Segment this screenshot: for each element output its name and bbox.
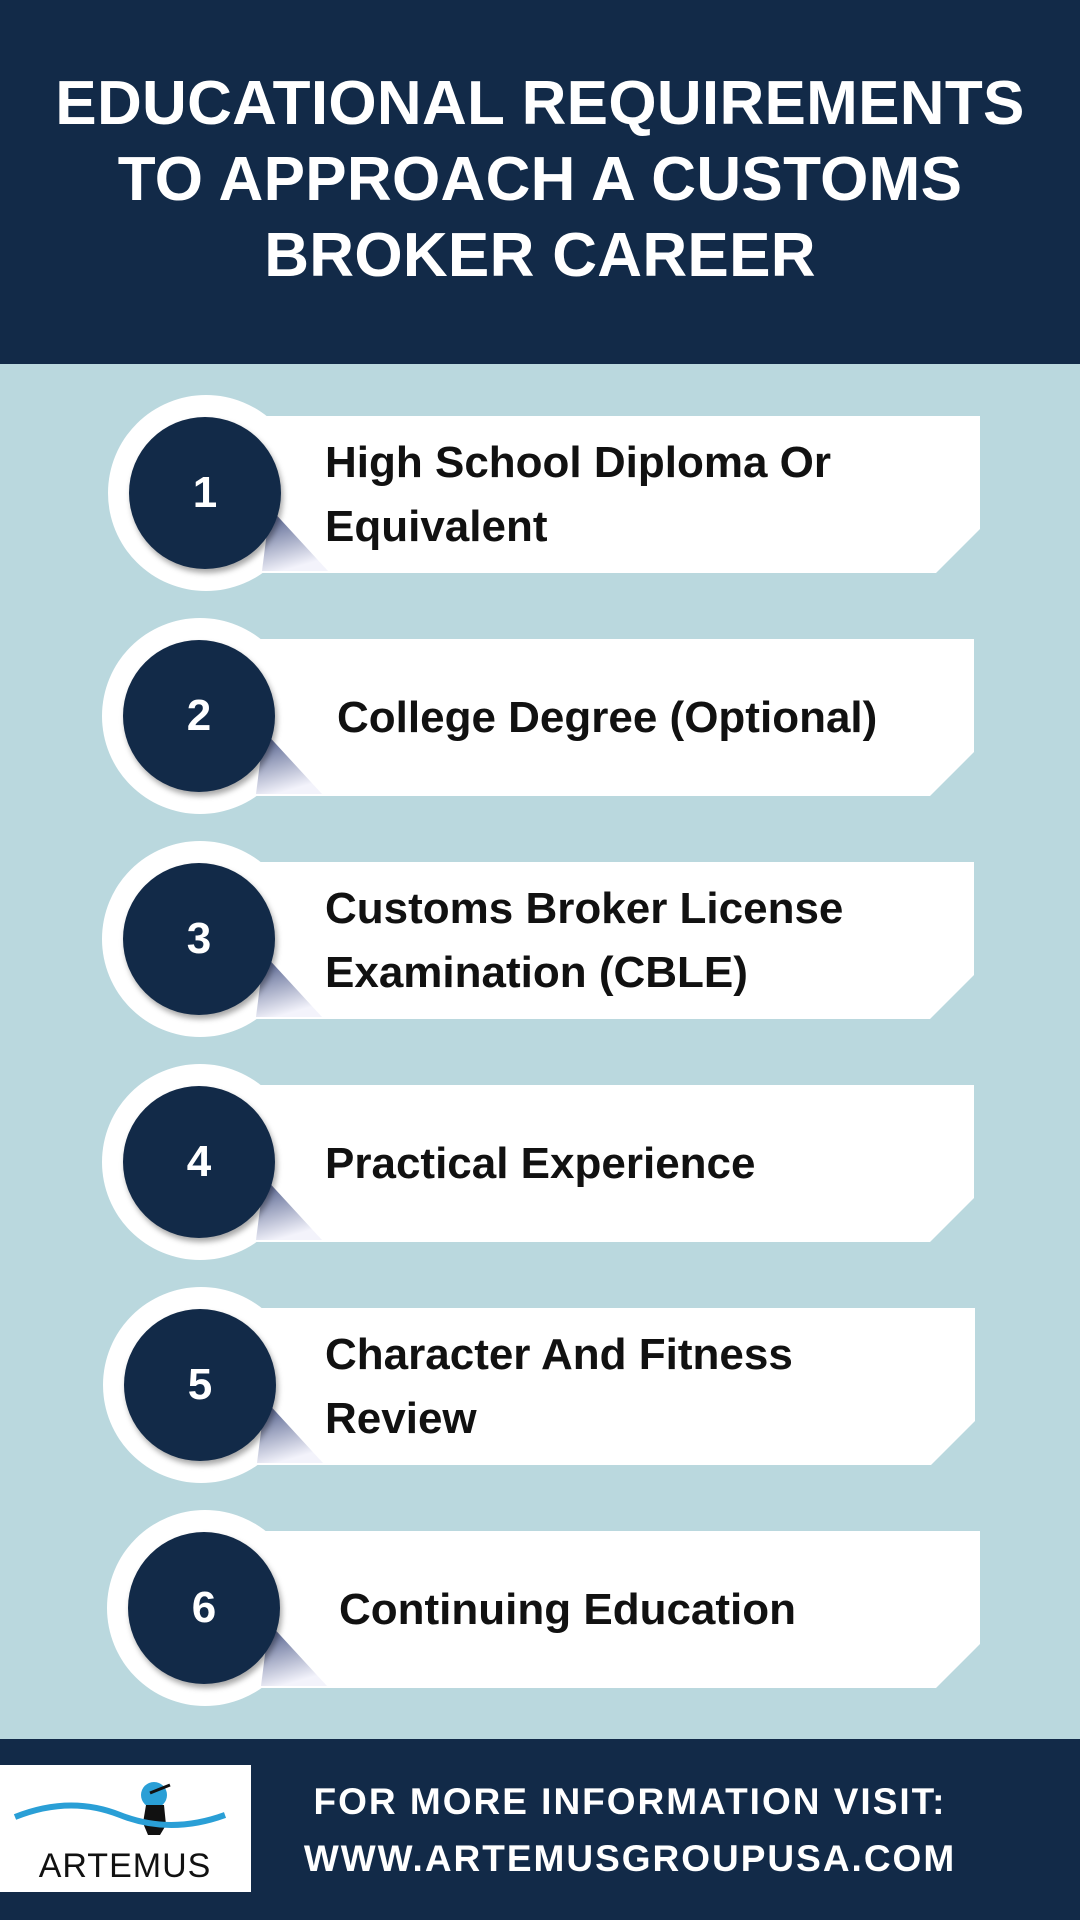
text 5: Review — [325, 1394, 477, 1442]
text 5 — [325, 1330, 793, 1442]
item 6 — [107, 1510, 980, 1706]
title — [55, 69, 1025, 290]
number 3: 3 — [187, 914, 211, 963]
number 2: 2 — [187, 691, 211, 740]
number 1 — [129, 417, 281, 569]
text 6: Continuing Education — [339, 1584, 796, 1634]
logo: Artemus: ARTEMUS — [39, 1847, 211, 1885]
number 1: 1 — [193, 468, 217, 517]
number 4 — [123, 1086, 275, 1238]
footer — [0, 1739, 1080, 1920]
item 2 — [102, 618, 974, 814]
number 3 — [123, 863, 275, 1015]
number 6 — [128, 1532, 280, 1684]
title: TO APPROACH A CUSTOMS — [118, 145, 962, 214]
text 3: Examination (CBLE) — [325, 948, 748, 996]
footer text: FOR MORE INFORMATION VISIT: — [314, 1781, 946, 1822]
number 4: 4 — [187, 1137, 211, 1186]
header — [0, 0, 1080, 364]
number 6: 6 — [192, 1583, 216, 1632]
item 3 — [102, 841, 974, 1037]
item 1 — [108, 395, 980, 591]
number 5 — [124, 1309, 276, 1461]
text 3 — [325, 884, 843, 996]
title: EDUCATIONAL REQUIREMENTS — [55, 69, 1025, 138]
number 5: 5 — [188, 1360, 212, 1409]
footer text — [304, 1781, 956, 1879]
item 4 — [102, 1064, 974, 1260]
footer text: WWW.ARTEMUSGROUPUSA.COM — [304, 1838, 956, 1879]
text 4: Practical Experience — [325, 1138, 755, 1188]
text 5: Character And Fitness — [325, 1330, 793, 1378]
title: BROKER CAREER — [264, 221, 816, 290]
text 1 — [325, 438, 831, 550]
item 5 — [103, 1287, 975, 1483]
text 1: High School Diploma Or — [325, 438, 831, 486]
text 1: Equivalent — [325, 502, 548, 550]
number 2 — [123, 640, 275, 792]
text 3: Customs Broker License — [325, 884, 843, 932]
text 2: College Degree (Optional) — [337, 692, 877, 742]
logo: Artemus — [0, 1765, 251, 1892]
